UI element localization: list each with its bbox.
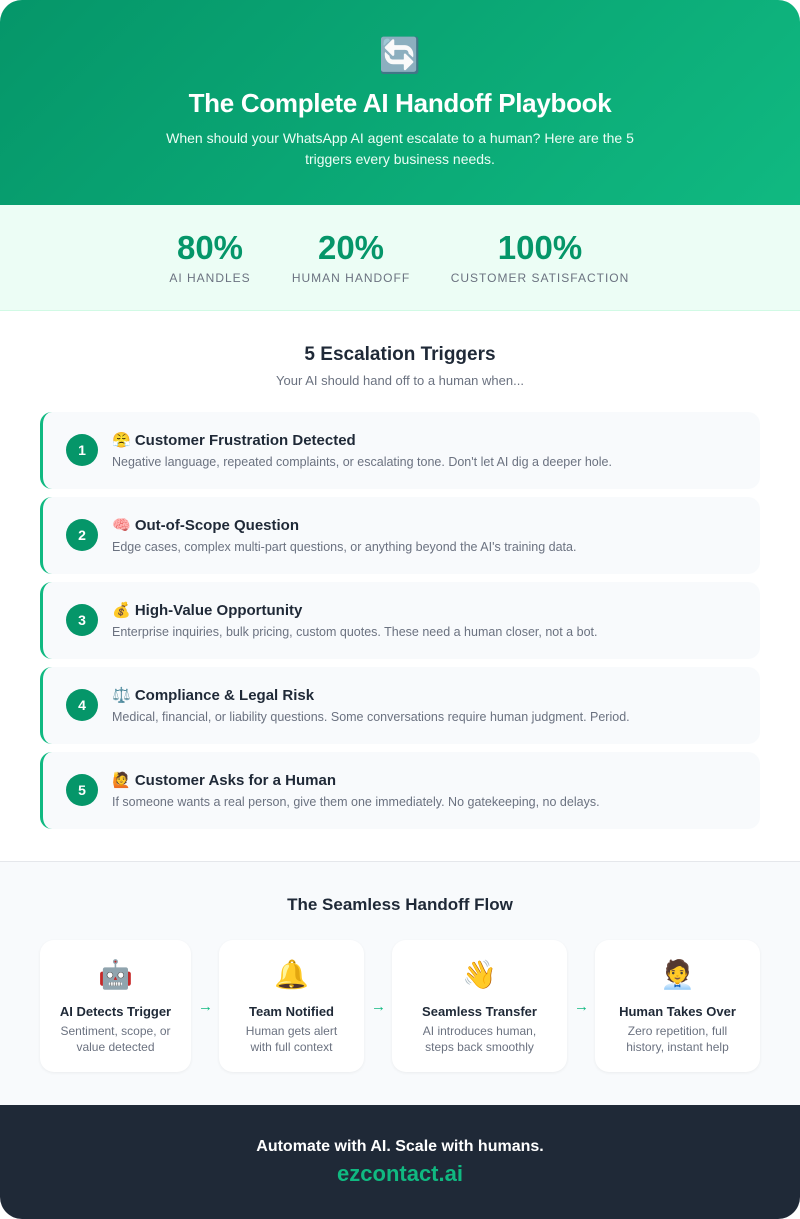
stat: human handoff: 20% [318,229,384,266]
trigger 2: Edge cases, complex multi-part questions, or anything beyond the AI's training data. [112,540,576,554]
step 3: Seamless Transfer [422,1004,537,1019]
step 2: Team Notified [249,1004,334,1019]
step 4 [595,940,760,1072]
step 4: history, instant help [626,1040,729,1054]
flow section [0,861,800,1105]
step 1: 🤖 [98,959,133,990]
header [0,0,800,205]
section subheading: Your AI should hand off to a human when... [276,373,524,388]
stat: AI handles [169,229,251,285]
trigger 4: ⚖️ Compliance & Legal Risk [112,687,314,704]
brand: ezcontact.ai [337,1161,463,1186]
icon: handoff arrows: 🔄 [379,37,421,75]
trigger 2: 2 [78,527,86,543]
trigger 4: 4 [78,697,86,713]
step 3: 👋 [462,959,497,990]
section heading: triggers: 5 Escalation Triggers [304,344,496,365]
stats band [0,205,800,311]
step 2: 🔔 [274,959,309,990]
trigger 4: Medical, financial, or liability questions. Some conversations require human judgment. Period. [112,710,630,724]
step 1: value detected [76,1040,155,1054]
title: The Complete AI Handoff Playbook [189,88,611,118]
trigger 2 [40,497,760,574]
stat: satisfaction [451,229,629,285]
step 2 [219,940,364,1072]
tagline: Automate with AI. Scale with humans. [256,1138,544,1155]
trigger 3: Enterprise inquiries, bulk pricing, custom quotes. These need a human closer, not a bot. [112,625,597,639]
trigger 5: 🙋 Customer Asks for a Human [112,772,336,789]
step 1: Sentiment, scope, or [60,1024,171,1038]
trigger 3: 💰 High-Value Opportunity [112,602,302,619]
stat: satisfaction: 100% [498,229,582,266]
step 4: Zero repetition, full [628,1024,727,1038]
step 2: with full context [250,1040,333,1054]
step 1: AI Detects Trigger [60,1004,171,1019]
stat: satisfaction: CUSTOMER SATISFACTION [451,271,629,285]
trigger 5: If someone wants a real person, give them one immediately. No gatekeeping, no delays. [112,795,600,809]
step 2: Human gets alert [246,1024,337,1038]
stat: AI handles: 80% [177,229,243,266]
footer [0,1105,800,1219]
arrow: → [371,998,386,1015]
step 3: steps back smoothly [425,1040,534,1054]
trigger 1: 1 [78,442,86,458]
trigger 3: 3 [78,612,86,628]
trigger 1: Negative language, repeated complaints, or escalating tone. Don't let AI dig a deeper hole. [112,455,612,469]
step 3 [392,940,567,1072]
stat: human handoff: HUMAN HANDOFF [292,271,410,285]
trigger 5: 5 [78,782,86,798]
trigger 4 [40,667,760,744]
trigger 3 [40,582,760,659]
subtitle: When should your WhatsApp AI agent escalate to a human? Here are the 5 triggers every business needs. [166,130,634,167]
arrow: → [198,998,213,1015]
stat: human handoff [292,229,410,285]
stat: AI handles: AI HANDLES [169,271,251,285]
arrow: → [574,998,589,1015]
flow heading: The Seamless Handoff Flow [287,895,513,914]
step 1 [40,940,191,1072]
trigger 1 [40,412,760,489]
trigger 1: 😤 Customer Frustration Detected [112,432,356,449]
trigger 2: 🧠 Out-of-Scope Question [112,517,299,534]
trigger 5 [40,752,760,829]
step 3: AI introduces human, [423,1024,536,1038]
step 4: 🧑‍💼 [660,959,695,990]
step 4: Human Takes Over [619,1004,736,1019]
